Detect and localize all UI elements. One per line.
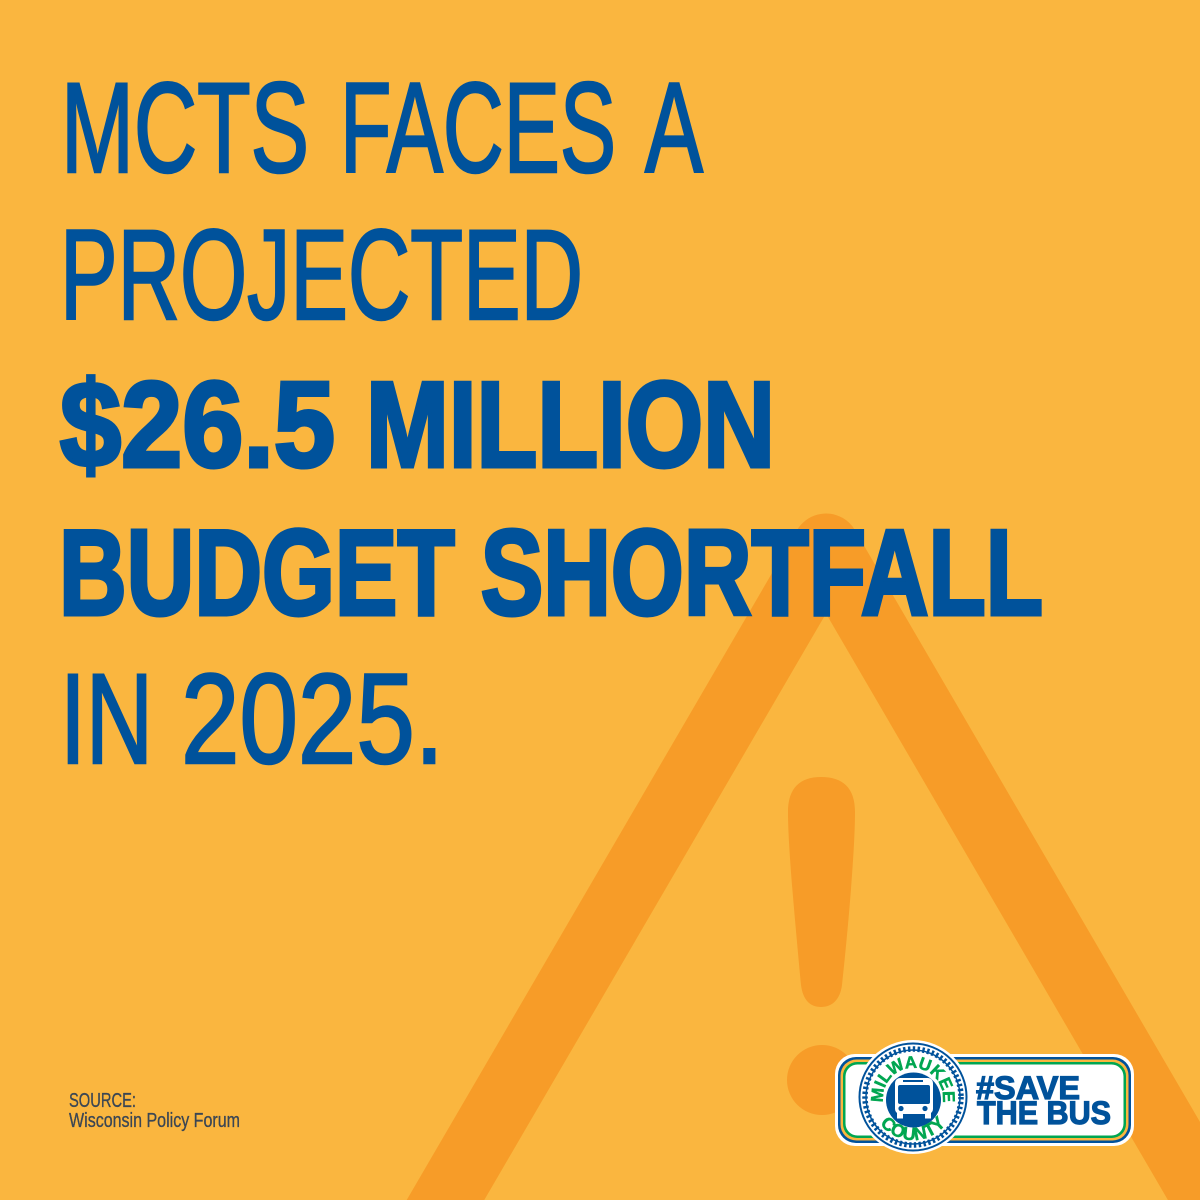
seal text: Milwaukee: MILWAUKEE: [870, 1056, 956, 1102]
headline line 1: [61, 57, 703, 200]
headline line 5: 2025.: [181, 648, 444, 791]
badge text: THE BUS: [977, 1095, 1111, 1131]
badge text: #SAVE: [976, 1070, 1080, 1106]
source label: SOURCE:: [69, 1090, 136, 1112]
badge: save the bus logo: [835, 1040, 1134, 1154]
headline line 5: IN: [60, 648, 153, 791]
badge frame: [835, 1054, 1134, 1146]
seal text: County: COUNTY: [882, 1115, 944, 1140]
source note: [69, 1090, 240, 1132]
headline line 1: FACES: [340, 57, 616, 200]
county seal: [858, 1040, 968, 1154]
headline line 1: A: [645, 57, 703, 200]
headline line 1: MCTS: [61, 57, 309, 200]
icon: warning triangle watermark: [428, 547, 1200, 1200]
headline line 3: [60, 356, 775, 492]
source name: Wisconsin Policy Forum: [69, 1110, 240, 1132]
headline line 3: MILLION: [366, 356, 775, 492]
headline: [59, 57, 1043, 791]
headline line 3: $26.5: [60, 356, 335, 492]
icon: bus: [895, 1078, 933, 1118]
headline line 5: [60, 648, 444, 791]
badge text: [976, 1070, 1111, 1131]
headline line 2: PROJECTED: [60, 204, 583, 347]
